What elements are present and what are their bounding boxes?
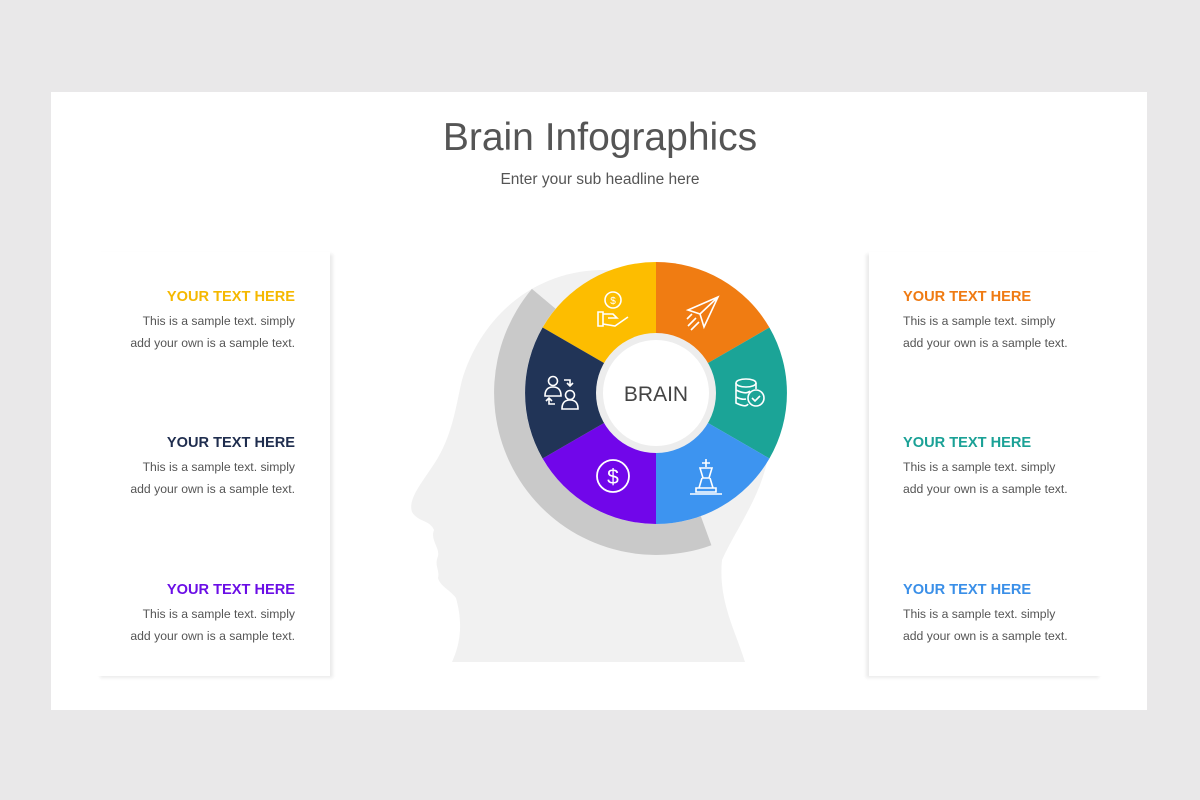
- item: blue: This is a sample text. simply: [903, 607, 1055, 621]
- icon: database check: [736, 379, 764, 406]
- icon: coin in hand: $: [610, 296, 616, 307]
- card background: [51, 92, 1147, 710]
- item: navy: This is a sample text. simply: [143, 460, 295, 474]
- item: teal: add your own is a sample text.: [903, 482, 1068, 496]
- item: blue: [903, 582, 1068, 643]
- item: purple: This is a sample text. simply: [143, 607, 295, 621]
- item: yellow: This is a sample text. simply: [143, 314, 295, 328]
- center circle: [596, 333, 716, 453]
- panel: right: [869, 252, 1102, 676]
- item: blue: YOUR TEXT HERE: [903, 582, 1031, 598]
- item: teal: [903, 435, 1068, 496]
- panel: left: [97, 252, 330, 676]
- icon: chess piece: [690, 459, 722, 494]
- item: yellow: YOUR TEXT HERE: [167, 289, 295, 305]
- center circle: BRAIN: [624, 383, 688, 406]
- item: orange: This is a sample text. simply: [903, 314, 1055, 328]
- icon: coin in hand: [598, 292, 628, 326]
- item: navy: add your own is a sample text.: [130, 482, 295, 496]
- item: purple: [130, 582, 295, 643]
- item: orange: YOUR TEXT HERE: [903, 289, 1031, 305]
- gray arc: [494, 289, 711, 555]
- item: yellow: add your own is a sample text.: [130, 336, 295, 350]
- item: purple: YOUR TEXT HERE: [167, 582, 295, 598]
- icon: dollar circle: [597, 460, 629, 492]
- item: orange: add your own is a sample text.: [903, 336, 1068, 350]
- item: yellow: [130, 289, 295, 350]
- head silhouette: [411, 270, 770, 662]
- icon: dollar circle: $: [607, 466, 619, 489]
- item: teal: YOUR TEXT HERE: [903, 435, 1031, 451]
- title: Brain Infographics: [443, 116, 757, 159]
- subtitle: Enter your sub headline here: [500, 171, 700, 188]
- item: teal: This is a sample text. simply: [903, 460, 1055, 474]
- item: purple: add your own is a sample text.: [130, 629, 295, 643]
- item: orange: [903, 289, 1068, 350]
- icon: people exchange: [545, 376, 578, 409]
- item: navy: [130, 435, 295, 496]
- icon: paper plane: [687, 297, 718, 330]
- item: blue: add your own is a sample text.: [903, 629, 1068, 643]
- item: navy: YOUR TEXT HERE: [167, 435, 295, 451]
- wheel: [525, 262, 787, 524]
